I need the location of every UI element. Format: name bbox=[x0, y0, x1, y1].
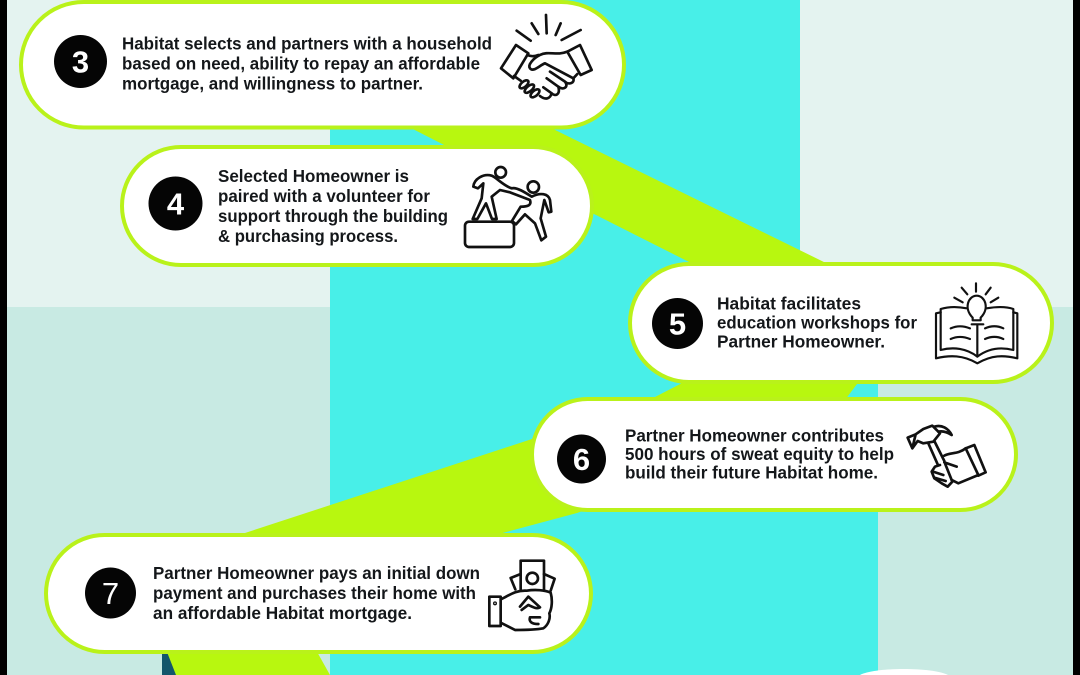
step 3 number: 3 bbox=[72, 44, 89, 80]
step 3 text: mortgage, and willingness to partner. bbox=[122, 74, 423, 94]
step 3 number bbox=[54, 35, 107, 88]
step 7 text: Partner Homeowner pays an initial down bbox=[153, 563, 480, 583]
next step pill top bbox=[860, 669, 948, 675]
step 7 text: an affordable Habitat mortgage. bbox=[153, 603, 412, 623]
step 5 text: Habitat facilitates bbox=[717, 294, 861, 314]
icon: hand holding cash bbox=[489, 561, 555, 630]
step 6 pill bbox=[532, 399, 1016, 510]
step 5 text bbox=[717, 294, 917, 352]
icon: handshake bbox=[501, 15, 592, 99]
step 4 number bbox=[148, 176, 202, 230]
step 6 text: Partner Homeowner contributes bbox=[625, 426, 884, 446]
icon: open book with light bulb bbox=[936, 283, 1017, 363]
step 4 text: paired with a volunteer for bbox=[218, 186, 430, 206]
step 7 number bbox=[85, 568, 136, 618]
step 7 text bbox=[153, 563, 480, 623]
step 4 text: & purchasing process. bbox=[218, 226, 398, 246]
step 4 text: Selected Homeowner is bbox=[218, 166, 409, 186]
connector ribbons bbox=[162, 0, 860, 675]
step 5 number bbox=[652, 298, 703, 349]
step 6 text: build their future Habitat home. bbox=[625, 462, 878, 482]
step 5 number: 5 bbox=[669, 306, 686, 342]
step 3 text: Habitat selects and partners with a household bbox=[122, 34, 492, 54]
step 7 number: 7 bbox=[102, 576, 119, 611]
step 4 text: support through the building bbox=[218, 206, 448, 226]
step 4 text bbox=[218, 166, 448, 246]
step 3 pill bbox=[21, 2, 624, 128]
step 7 pill bbox=[46, 535, 591, 652]
step 4 pill bbox=[122, 147, 592, 265]
icon: hand holding hammer bbox=[908, 426, 986, 487]
step 5 text: Partner Homeowner. bbox=[717, 332, 885, 352]
step 6 number bbox=[557, 434, 606, 484]
step 4 number: 4 bbox=[167, 186, 185, 222]
step 3 text bbox=[122, 34, 492, 94]
icon: helping hand climbers bbox=[465, 167, 551, 247]
step 5 pill bbox=[630, 264, 1052, 382]
step 3 text: based on need, ability to repay an affordable bbox=[122, 54, 480, 74]
step 6 number: 6 bbox=[573, 442, 590, 477]
step 6 text bbox=[625, 426, 894, 482]
step 7 text: payment and purchases their home with bbox=[153, 583, 476, 603]
step 5 text: education workshops for bbox=[717, 312, 917, 332]
step 6 text: 500 hours of sweat equity to help bbox=[625, 444, 894, 464]
